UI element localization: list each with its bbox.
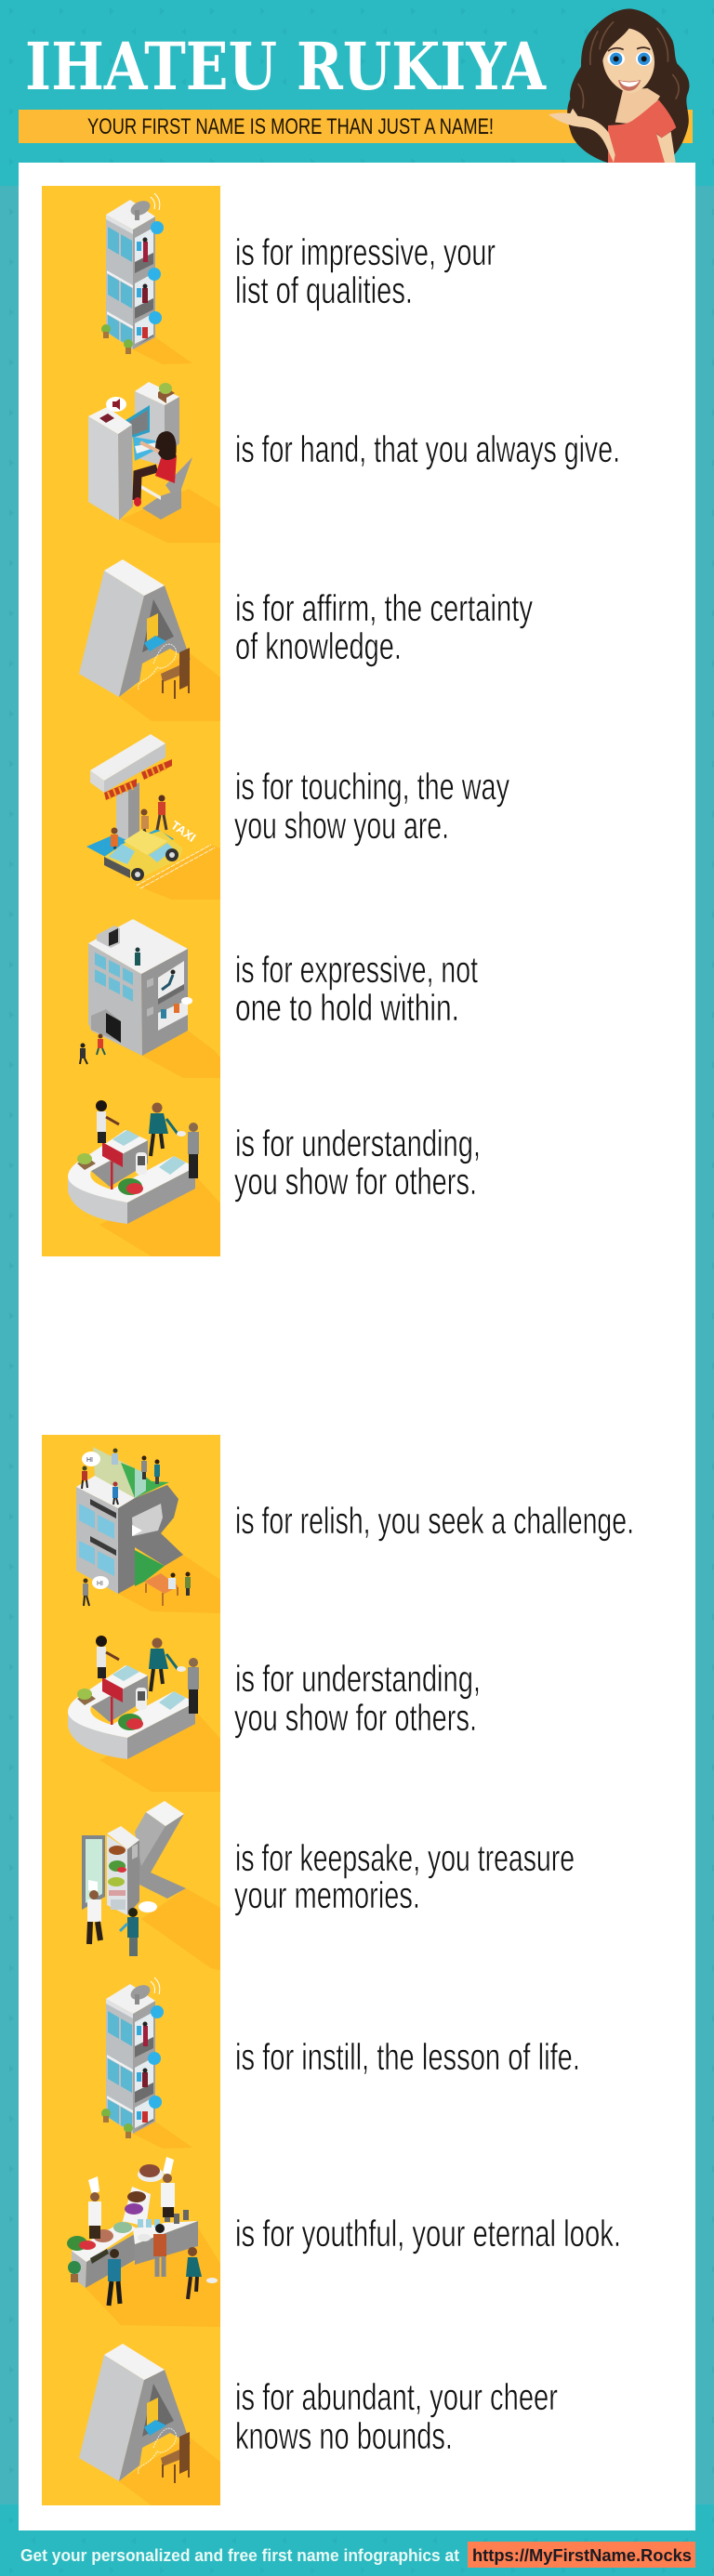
icon: cartoon woman mascot <box>549 8 689 163</box>
text: K line: is for keepsake, you treasure <box>235 1838 575 1879</box>
text: T line: you show you are. <box>234 806 449 847</box>
tile: letter U counter repeat <box>42 1613 220 1792</box>
text: I line <box>235 232 496 311</box>
subtitle banner: YOUR FIRST NAME IS MORE THAN JUST A NAME! <box>87 114 494 139</box>
tile: letter T with taxi <box>42 721 220 900</box>
footer link button: https://MyFirstName.Rocks <box>472 2546 692 2565</box>
footer link button <box>468 2542 695 2568</box>
text: K line: your memories. <box>234 1875 420 1916</box>
tile: letter R building: HI <box>97 1581 103 1587</box>
text: A line <box>235 588 533 667</box>
tile: letter R building: HI <box>86 1457 93 1464</box>
text: U line <box>234 1124 481 1203</box>
text: I line: is for impressive, your <box>235 232 496 273</box>
text: I line repeat: is for instill, the lesson of life. <box>235 2037 580 2078</box>
tile: letter R building <box>42 1435 220 1613</box>
text: U line repeat: is for understanding, <box>235 1659 481 1700</box>
text: A line repeat <box>235 2377 558 2457</box>
tile: letter I repeat <box>42 1970 220 2149</box>
text: T line <box>234 767 509 847</box>
subtitle banner <box>19 110 693 143</box>
footer call to action: Get your personalized and free first name infographics at <box>20 2546 459 2565</box>
tile: letter K fridge <box>42 1792 220 1970</box>
text: T line: is for touching, the way <box>235 767 509 808</box>
tile: letter H <box>42 364 220 543</box>
text: K line <box>234 1838 575 1916</box>
text: U line: you show for others. <box>234 1162 477 1203</box>
text: U line repeat <box>234 1659 481 1739</box>
text: A line repeat: knows no bounds. <box>235 2416 453 2457</box>
text: A line: of knowledge. <box>235 626 402 667</box>
text: U line repeat: you show for others. <box>234 1698 477 1739</box>
text: E line <box>235 950 478 1029</box>
title: IHATEU RUKIYA <box>25 28 547 105</box>
text: A line: is for affirm, the certainty <box>235 588 533 629</box>
tile: letter E office <box>42 900 220 1078</box>
tile: letter T with taxi: TAXI <box>168 818 198 845</box>
tile: letter U counter <box>42 1078 220 1256</box>
tile: letter Y buffet <box>42 2149 220 2327</box>
tile: letter I <box>42 186 220 364</box>
text: E line: one to hold within. <box>235 988 459 1029</box>
tile: letter A repeat <box>42 2327 220 2505</box>
text: I line: list of qualities. <box>235 270 413 311</box>
text: E line: is for expressive, not <box>235 950 478 991</box>
text: U line: is for understanding, <box>235 1124 481 1164</box>
text: A line repeat: is for abundant, your cheer <box>235 2377 558 2418</box>
tile: letter A <box>42 543 220 721</box>
